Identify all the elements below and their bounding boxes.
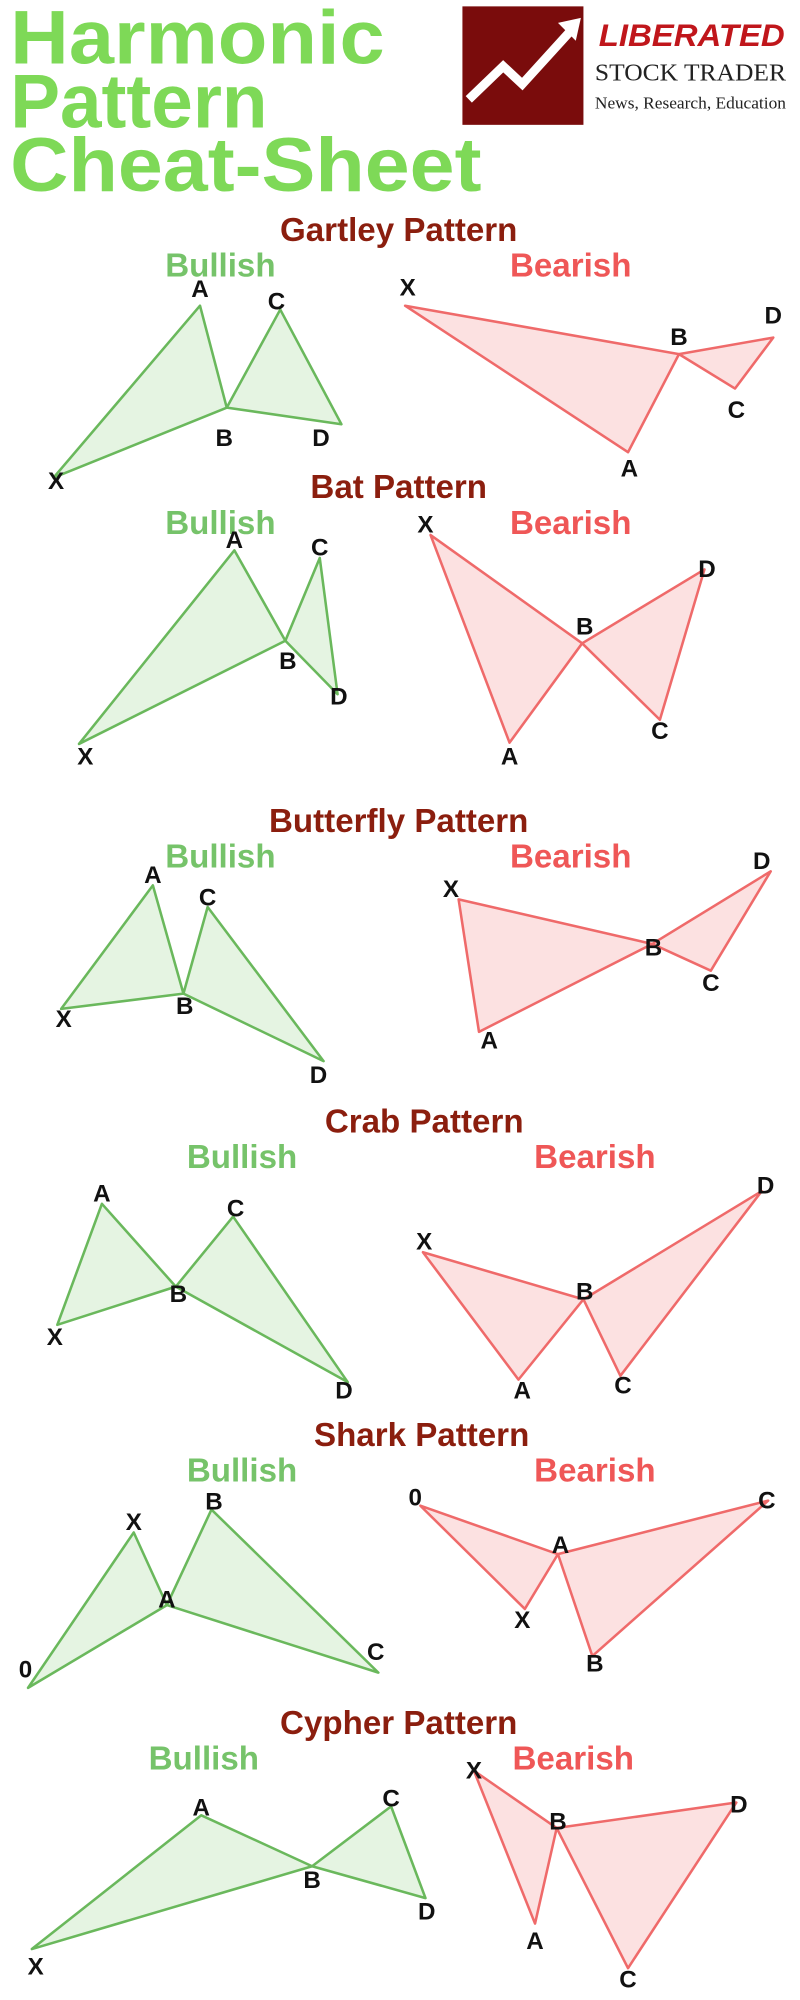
section: Gartley: Gartley Pattern [280,212,517,249]
chart: crab bearish: X [416,1229,432,1256]
chart: cypher bearish: B [549,1808,567,1835]
chart: shark bearish: C [758,1487,776,1514]
section: Shark [19,1417,776,1688]
chart: gartley bullish: D [312,425,330,452]
chart: shark bearish [409,1485,776,1677]
chart: bat bullish: B [279,648,297,675]
chart: shark bearish: 0 [409,1485,422,1512]
section: Cypher: Bullish [149,1740,259,1777]
chart: butterfly bullish: C [199,885,216,912]
logo: STOCK TRADER [595,59,787,86]
title [10,0,482,208]
chart: butterfly bullish [56,862,327,1089]
chart: cypher bearish: A [526,1928,544,1955]
chart: crab bullish: C [227,1196,244,1223]
section: Bat: Bearish [510,505,631,542]
chart: crab bullish: D [335,1378,353,1405]
chart: crab bullish: A [93,1180,111,1207]
chart: butterfly bullish: B [176,993,193,1020]
title: Pattern [10,59,268,144]
chart: gartley bullish: A [191,276,209,303]
chart: butterfly bearish: C [702,970,720,997]
section: Cypher: Cypher Pattern [280,1705,517,1742]
chart: shark bullish: X [126,1509,142,1536]
section: Bat: Bullish [165,505,276,542]
chart: cypher bearish [466,1757,748,1993]
chart: cypher bearish: D [730,1792,748,1819]
chart: butterfly bullish: D [310,1062,327,1089]
chart: crab bearish: D [757,1173,774,1200]
chart: butterfly bearish: A [480,1027,498,1054]
chart: gartley bearish: C [728,397,745,424]
chart: cypher bearish: X [466,1757,482,1784]
section: Bat [77,469,716,770]
chart: bat bullish: C [311,534,328,561]
chart: cypher bearish: C [619,1966,637,1993]
chart: crab bearish: A [514,1378,531,1405]
section: Bat: Bat Pattern [310,469,487,506]
section: Gartley: Bullish [165,247,276,284]
section: Crab: Crab Pattern [325,1103,524,1140]
section: Shark: Bearish [534,1453,656,1490]
section: Butterfly [56,803,771,1089]
chart: bat bearish: A [501,743,518,770]
chart: gartley bullish: B [215,425,233,452]
chart: bat bearish: C [651,718,669,745]
chart: crab bearish: B [576,1278,593,1305]
chart: bat bullish [77,527,348,770]
section: Cypher: Bearish [513,1740,634,1777]
chart: shark bearish: B [586,1650,604,1677]
section: Gartley [48,212,782,495]
chart: crab bullish: X [47,1324,63,1351]
chart: cypher bullish: C [382,1785,400,1812]
chart: shark bullish: 0 [19,1657,32,1684]
chart: gartley bearish: X [400,275,416,302]
chart: cypher bullish: A [193,1794,210,1821]
chart: butterfly bearish: D [753,848,771,875]
chart: bat bullish: D [330,683,348,710]
chart: shark bullish: B [205,1489,223,1516]
chart: gartley bearish: A [621,455,638,482]
section: Crab [47,1103,774,1405]
section: Cypher [28,1705,748,1993]
chart: gartley bullish: X [48,468,64,495]
section: Butterfly: Butterfly Pattern [269,803,528,840]
section: Gartley: Bearish [510,247,631,284]
chart: bat bearish: X [417,511,434,538]
chart: butterfly bullish: A [144,862,162,889]
title: Cheat-Sheet [10,123,482,208]
section: Crab: Bearish [534,1139,656,1176]
chart: bat bearish [417,511,716,770]
section: Butterfly: Bullish [165,839,276,876]
chart: cypher bullish: X [28,1954,44,1981]
chart: gartley bullish [48,276,341,495]
chart: shark bullish [19,1489,385,1688]
chart: shark bearish: X [514,1607,530,1634]
chart: shark bullish: C [367,1639,385,1666]
chart: crab bearish [416,1173,774,1405]
chart: shark bearish: A [552,1532,569,1559]
section: Shark: Shark Pattern [314,1417,529,1454]
chart: butterfly bearish: B [645,934,662,961]
chart: cypher bullish: B [303,1867,321,1894]
chart: bat bearish: B [576,613,593,640]
chart: gartley bearish: B [670,324,688,351]
chart: butterfly bearish: X [443,876,459,903]
chart: butterfly bearish [443,848,771,1054]
logo: News, Research, Education [595,93,786,112]
chart: gartley bullish: C [268,289,285,316]
chart: gartley bearish [400,275,782,482]
logo [462,6,787,125]
logo: LIBERATED [599,17,785,53]
chart: butterfly bullish: X [56,1006,72,1033]
chart: crab bearish: C [614,1373,632,1400]
section: Butterfly: Bearish [510,839,631,876]
chart: shark bullish: A [158,1587,176,1614]
section: Crab: Bullish [187,1139,297,1176]
chart: bat bullish: X [77,743,93,770]
section: Shark: Bullish [187,1453,297,1490]
chart: crab bullish [47,1180,353,1405]
chart: bat bearish: D [698,556,716,583]
chart: cypher bullish [28,1785,435,1981]
chart: bat bullish: A [226,527,243,554]
chart: cypher bullish: D [418,1899,435,1926]
chart: crab bullish: B [170,1281,187,1308]
chart: gartley bearish: D [765,303,782,330]
